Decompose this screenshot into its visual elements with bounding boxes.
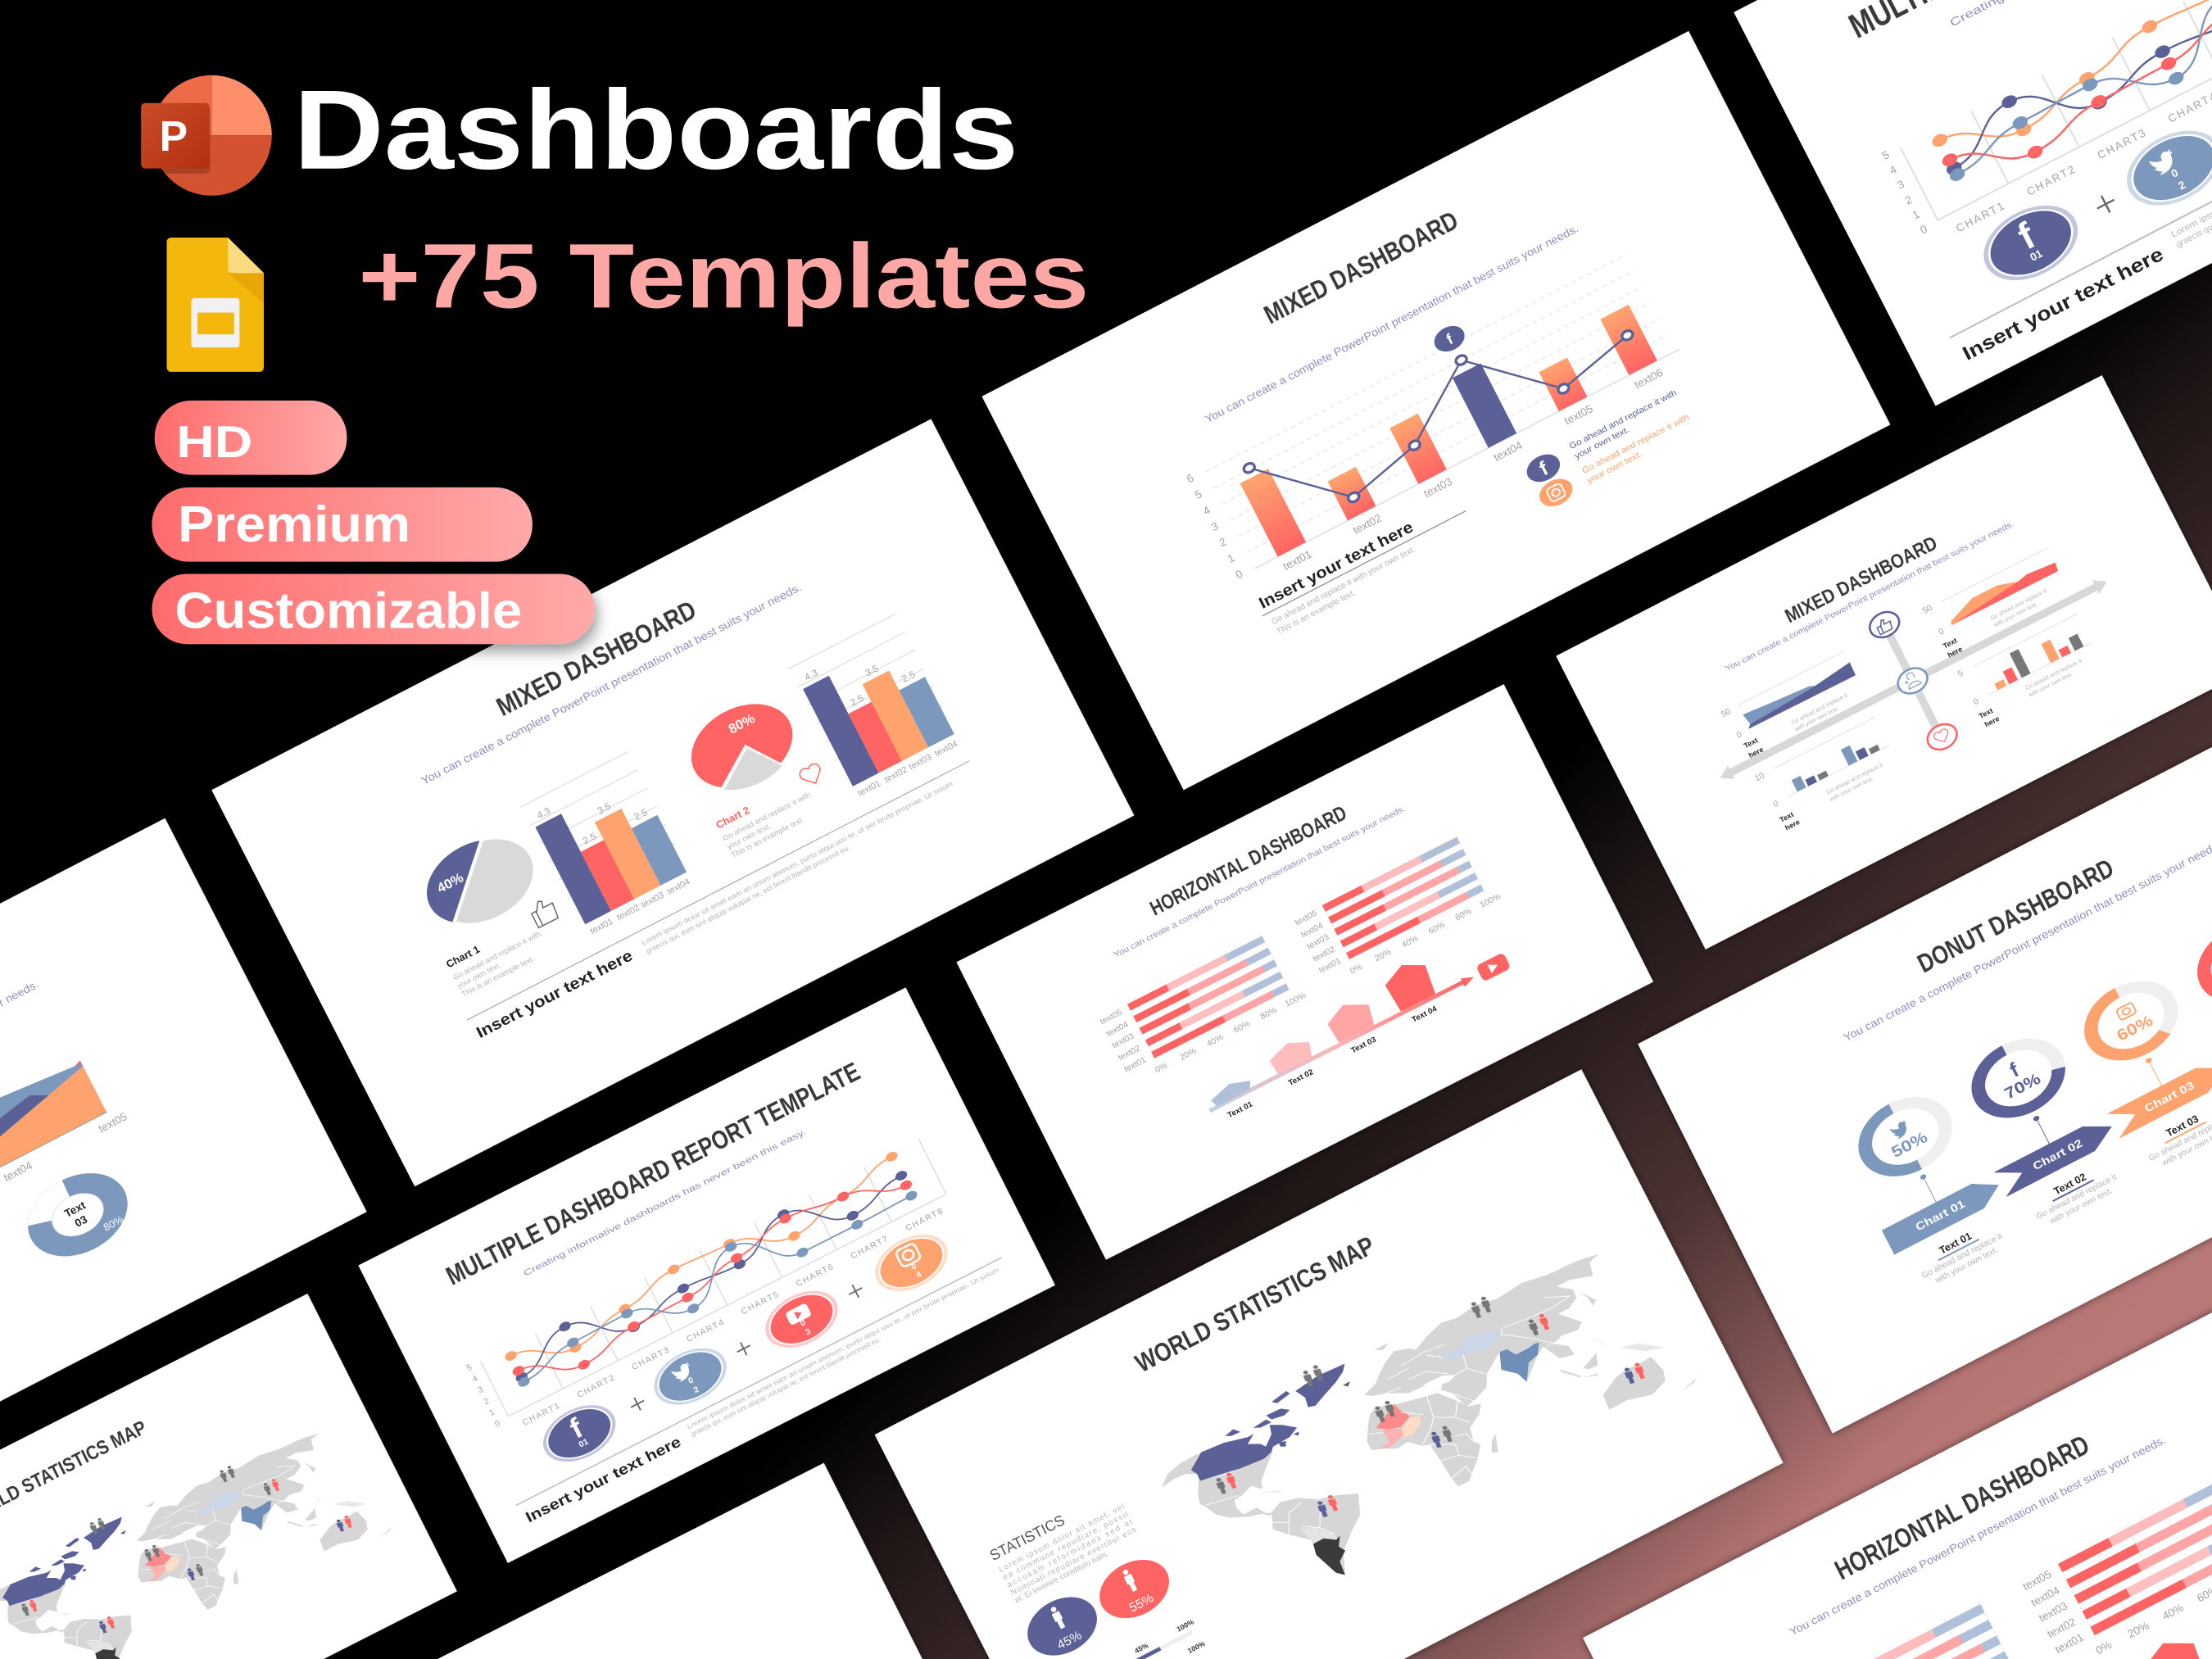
bar and line chart: text03: [1421, 475, 1454, 500]
subtitle: You can create a complete PowerPoint presentation that best suits your needs.: [1203, 222, 1580, 425]
cross arrows and circles: [1687, 515, 2141, 845]
badge labels: f: [565, 1412, 588, 1445]
captions: with your own text.: [1933, 1245, 2000, 1285]
chart 1 text: Chart 1: [444, 944, 482, 970]
chart labels: 40%: [1400, 934, 1420, 950]
subtitle: You can create a complete PowerPoint presentation that best suits your needs.: [419, 581, 803, 787]
title: MIXED DASHBOARD: [1259, 205, 1462, 329]
chart 2 text: This is an example text.: [730, 815, 805, 859]
legend icons: f: [1536, 457, 1552, 480]
bar chart 2: text04: [933, 739, 959, 759]
insert text block: graecis qui, eum sint aliquip volutpat ne, est ferent blandit processit eu.: [645, 843, 851, 955]
area chart right: 50: [1921, 604, 1934, 616]
bar and line chart: 4: [1201, 504, 1213, 518]
chart 2 text: Chart 2: [714, 805, 751, 832]
bar chart left: here: [1784, 818, 1802, 832]
bar chart right: Text: [1978, 706, 1994, 720]
chart labels: text03: [2037, 1599, 2069, 1625]
area chart: text05: [97, 1110, 129, 1135]
title: MIXED DASHBOARD: [492, 595, 700, 722]
statistics text: et. Ei invenire constituto nam.: [1013, 1549, 1110, 1605]
chart labels: CHART6: [795, 1262, 836, 1289]
chart 1 text: This is an example text.: [460, 954, 536, 999]
chart labels: CHART5: [740, 1290, 782, 1317]
ribbons and connectors: [1868, 970, 2212, 1255]
area chart: text04: [2, 1159, 34, 1184]
chart labels: 4: [471, 1374, 479, 1385]
bar and line chart: text05: [1562, 402, 1595, 427]
bar chart 2: 3.5: [863, 663, 881, 678]
area chart right: Text: [1942, 637, 1958, 650]
map: [1032, 1036, 1829, 1659]
pill: Premium: [152, 487, 533, 562]
chart labels: 40%: [2160, 1602, 2186, 1622]
panel: horizontal dashboard bottom right: [1583, 1272, 2212, 1659]
pill: Premium: Premium: [178, 496, 410, 553]
title: MIXED DASHBOARD: [1782, 533, 1941, 628]
bar chart right: with your own text.: [2028, 672, 2074, 699]
pie 1: [413, 821, 547, 942]
panel: multiple dashboard top right: Insert your text here: [1959, 243, 2167, 365]
area chart right: 0: [1938, 627, 1946, 637]
donut 4: [2179, 903, 2212, 1022]
chart labels: text01: [2053, 1631, 2086, 1656]
area chart left: Go ahead and replace it: [1791, 693, 1848, 726]
panel: multiple dashboard top right: 3: [1895, 178, 1906, 192]
panel: multiple dashboard top right: 01: [2028, 247, 2045, 264]
bar chart 1: text01: [589, 917, 614, 936]
bar chart 2: 4.3: [803, 668, 820, 683]
stacked bars and houses: [1805, 1471, 2212, 1659]
legend text: [1568, 388, 1696, 486]
chart labels: Text 01: [1226, 1099, 1255, 1120]
panel: multiple dashboard top right: 1: [1911, 208, 1922, 222]
progress bars: [1128, 1617, 1207, 1659]
captions: [1913, 1100, 2212, 1290]
panel: mixed dashboard line and bars: [981, 31, 1890, 790]
pie 2: 80%: [726, 710, 758, 737]
legend text: Go ahead and replace it with: [1568, 388, 1679, 451]
chart labels: [1099, 832, 1535, 1153]
bar chart 2: text03: [908, 752, 933, 772]
panel: horizontal dashboard center: [956, 684, 1653, 1260]
ribbons and connectors: Chart 01: [1914, 1197, 1968, 1233]
title: WORLD STATISTICS MAP: [1131, 1231, 1379, 1378]
chart labels: 0: [494, 1419, 502, 1429]
subtitle: You can create a complete PowerPoint presentation that best suits your needs.: [1842, 839, 2212, 1044]
panel: multiple dashboard top right: 4: [1888, 163, 1899, 177]
donut 3: 60%: [2115, 1013, 2156, 1045]
panel: multiple dashboard top right: 0: [2169, 166, 2180, 180]
statistics text: accusam reformidans sed at: [1005, 1517, 1134, 1590]
donut 1: [1854, 1090, 1957, 1184]
stacked bars and houses: [1126, 835, 1521, 1131]
chart labels: text05: [1099, 1008, 1124, 1027]
panel: multiple dashboard top right: f: [2011, 214, 2042, 257]
donut text 03: 03: [73, 1213, 89, 1230]
chart labels: 2: [483, 1397, 491, 1407]
insert text block: [1253, 493, 1478, 639]
chart 1 text: Go ahead and replace it with: [451, 930, 542, 981]
captions: with your own text.: [2048, 1186, 2114, 1226]
panel: multiple dashboard top right: CHART1: [1954, 199, 2007, 234]
bar chart left: 0: [1772, 799, 1780, 809]
area chart left: 50: [1720, 707, 1733, 719]
panel: mixed dashboard cross: [1556, 375, 2212, 950]
subtitle: You can create a complete PowerPoint presentation that best suits your needs.: [1724, 519, 2015, 673]
donut 2: [1953, 1019, 2083, 1138]
chart labels: CHART8: [904, 1207, 945, 1233]
chart labels: 20%: [1179, 1047, 1198, 1063]
chart labels: text03: [1306, 933, 1330, 951]
bar and line chart: text06: [1632, 366, 1665, 391]
chart 1 text: your own text.: [456, 961, 502, 990]
ribbons and connectors: Chart 03: [2142, 1079, 2196, 1115]
bar chart right: Go ahead and replace it: [2024, 659, 2083, 691]
bar chart 1: text03: [640, 891, 666, 910]
subtitle: You can create a complete PowerPoint presentation that best suits your needs.: [1113, 805, 1407, 960]
pill: HD: HD: [176, 416, 252, 467]
map: [0, 1268, 492, 1659]
donut text 03: Text: [62, 1199, 88, 1220]
chart labels: text02: [2045, 1616, 2078, 1640]
subtitle: Creating informative dashboards has never been this easy.: [523, 1127, 808, 1279]
chart labels: 40%: [1206, 1033, 1225, 1049]
statistics text: STATISTICS: [986, 1512, 1067, 1564]
chart labels: text05: [2021, 1568, 2053, 1593]
chart labels: CHART2: [576, 1373, 617, 1400]
panel: multiple dashboard top right: 5: [1880, 148, 1891, 162]
donut text 03: 80%: [102, 1213, 125, 1233]
area chart left: with your own text.: [1793, 706, 1840, 733]
progress bars: 45%: [1133, 1641, 1149, 1655]
chart labels: 80%: [1259, 1006, 1279, 1022]
panel: multiple dashboard top right: CHART2: [2024, 162, 2078, 198]
bar and line chart: 2: [1217, 535, 1228, 549]
subtitle: You can create a complete PowerPoint presentation that best suits your needs.: [1788, 1434, 2168, 1639]
insert text block: Go ahead and replace it with your own text.: [1270, 545, 1416, 627]
bar and line chart: text01: [1281, 548, 1313, 573]
bar chart 1: text02: [615, 903, 641, 922]
bar chart 1: 3.5: [596, 801, 613, 817]
title: DONUT DASHBOARD: [1913, 853, 2119, 978]
captions: Go ahead and replace it: [1920, 1232, 2004, 1281]
chart 2 text: [714, 777, 821, 859]
bar and line chart: 1: [1226, 551, 1236, 565]
chart labels: text03: [1111, 1031, 1136, 1050]
pill: HD: [155, 401, 347, 475]
bar chart right: here: [1983, 714, 2001, 728]
badge labels: 01: [578, 1437, 590, 1449]
area chart right: Go ahead and replace it: [1990, 588, 2047, 622]
captions: Go ahead and replace it: [2035, 1172, 2119, 1222]
chart labels: 3: [477, 1385, 485, 1395]
bar chart 2: 2.5: [900, 669, 918, 685]
panel: world statistics map: [863, 1036, 1829, 1659]
chart labels: 0%: [2094, 1639, 2114, 1657]
bar chart left: Text: [1779, 810, 1795, 824]
area chart left: 0: [1735, 730, 1743, 741]
title: HORIZONTAL DASHBOARD: [1830, 1430, 2094, 1586]
pill: Customizable: Customizable: [175, 582, 522, 639]
captions: Text 02: [2052, 1171, 2088, 1197]
panel: left stacked area and donut: [0, 818, 367, 1577]
chart labels: 80%: [1454, 907, 1473, 922]
area chart right: [1921, 545, 2073, 660]
bar chart left: 10: [1753, 771, 1766, 783]
icon: powerpoint: P: [160, 112, 188, 160]
panel: world statistics map left: [0, 1268, 492, 1659]
chart labels: text04: [2029, 1584, 2062, 1609]
panel: donut dashboard: [1638, 678, 2212, 1434]
badge labels: 0: [910, 1262, 918, 1272]
bar chart 1: 2.5: [581, 831, 598, 846]
chart 1 text: [444, 915, 551, 999]
heading: Dashboards: Dashboards: [293, 67, 1018, 193]
statistics text: ea commune repudiare, possit: [1002, 1510, 1131, 1582]
area chart left: [1720, 649, 1869, 762]
badge labels: 2: [692, 1385, 700, 1395]
chart labels: Text 02: [1287, 1067, 1315, 1088]
chart 2 text: Go ahead and replace it with: [722, 791, 812, 842]
panel: multiple dashboard top right: 2: [2176, 179, 2187, 193]
chart labels: 60%: [1427, 921, 1447, 936]
insert text block: [467, 761, 981, 1044]
pie 1: 40%: [434, 870, 466, 896]
insert text block: Lorem ipsum dolor sit amet eam an unum alienum, purto atqui usu te, ut per brute propriae. Ut solum: [640, 780, 954, 947]
area chart left: here: [1747, 746, 1765, 759]
chart labels: Text 04: [1411, 1004, 1439, 1025]
chart labels: 5: [465, 1363, 474, 1373]
chart labels: 1: [488, 1407, 496, 1418]
bar and line chart: text02: [1351, 512, 1384, 537]
donut 1: 50%: [1889, 1129, 1930, 1162]
chart labels: 0%: [1154, 1062, 1169, 1075]
panel: blank slide bottom: [277, 1463, 973, 1659]
progress bars: 100%: [1175, 1617, 1195, 1634]
chart labels: text01: [1317, 957, 1343, 975]
chart labels: text05: [1294, 909, 1319, 927]
bar chart 2: text01: [856, 778, 882, 798]
gender circles: 45%: [1055, 1629, 1084, 1652]
panel: mixed dashboard pies: [211, 419, 1134, 1186]
statistics text: [986, 1484, 1142, 1606]
insert text block: Insert your text here: [1257, 519, 1416, 613]
bar chart right: [1956, 610, 2105, 729]
legend text: your own text.: [1585, 449, 1643, 486]
panel: multiple dashboard report template: [358, 987, 1055, 1563]
chart labels: text04: [1300, 921, 1325, 940]
donut text 03: [14, 1157, 142, 1272]
donut 2: f: [2006, 1058, 2023, 1082]
bar chart 1: 2.5: [632, 807, 650, 823]
area chart left: Text: [1743, 736, 1759, 750]
bar chart 1: 4.3: [535, 805, 552, 821]
bar chart left: Go ahead and replace it: [1825, 763, 1883, 796]
chart labels: [1770, 1503, 2212, 1659]
panel: multiple dashboard top right: 0: [1918, 223, 1929, 236]
badge labels: 0: [687, 1376, 696, 1386]
bar and line chart: text04: [1492, 439, 1525, 464]
area chart: [0, 1049, 129, 1226]
chart labels: CHART7: [850, 1235, 891, 1261]
panel: multiple dashboard top right: [1734, 0, 2212, 406]
insert text block: Insert your text here: [474, 947, 636, 1042]
icon: thumb: [528, 896, 560, 928]
pie 2: [677, 687, 808, 807]
bar chart 1: text04: [666, 877, 691, 896]
bar chart right: 5: [1956, 669, 1965, 679]
badge labels: 3: [804, 1327, 813, 1337]
ribbons and connectors: Chart 02: [2031, 1137, 2084, 1172]
statistics text: Nominati repudiare evertitur eos: [1009, 1525, 1138, 1598]
heading: +75 Templates: +75 Templates: [358, 224, 1089, 327]
chart labels: 60%: [1232, 1019, 1252, 1036]
title: HORIZONTAL DASHBOARD: [1147, 802, 1350, 920]
bar and line chart: f: [1444, 330, 1457, 347]
chart labels: text01: [1123, 1056, 1148, 1074]
chart labels: CHART4: [686, 1317, 727, 1344]
insert text block: Insert your text here: [523, 1433, 683, 1525]
bar chart left: [1753, 714, 1903, 834]
chart labels: text04: [1105, 1020, 1130, 1039]
chart labels: CHART3: [631, 1345, 672, 1372]
bar chart right: 0: [1972, 697, 1980, 707]
bar and line chart: 0: [1234, 568, 1244, 581]
bar chart 2: [788, 614, 963, 801]
legend text: Go ahead and replace it with: [1580, 412, 1691, 476]
chart labels: text02: [1312, 945, 1337, 963]
icon: powerpoint: [141, 75, 272, 196]
badge labels: 0: [799, 1318, 808, 1329]
panel: multiple dashboard top right: 2: [1903, 193, 1914, 207]
panel: multiple dashboard top right: CHART3: [2096, 126, 2149, 161]
chart 2 text: your own text.: [726, 822, 772, 851]
chart labels: [465, 1140, 945, 1439]
bar chart left: with your own text.: [1829, 776, 1874, 803]
chart labels: 20%: [1374, 948, 1393, 963]
bar chart 2: 2.5: [849, 693, 866, 709]
bar and line chart: 6: [1185, 472, 1195, 485]
bar chart 1: [520, 751, 696, 939]
captions: Text 01: [1938, 1231, 1974, 1257]
legend icons: [1522, 449, 1577, 512]
title: MULTIPLE DASHBOARD REPORT TEMPLATE: [442, 1057, 864, 1290]
gender circles: 55%: [1127, 1591, 1156, 1616]
insert text block: Lorem ipsum dolor sit amet eam an unum alienum, purto atqui usu te, ut per brute propriae. Ut solum: [686, 1266, 1000, 1430]
statistics text: Lorem ipsum dolor sit amet, vel: [998, 1503, 1126, 1575]
chart labels: CHART1: [521, 1401, 562, 1428]
chart labels: text02: [1117, 1044, 1142, 1063]
insert text block: [521, 1266, 1006, 1525]
area chart right: with your own text.: [1992, 601, 2038, 629]
area chart right: here: [1947, 645, 1964, 659]
icon: google slides: [167, 238, 264, 372]
chart labels: 0%: [1349, 963, 1364, 976]
legend text: your own text.: [1573, 424, 1631, 461]
gender circles: [1018, 1548, 1179, 1659]
bar and line chart: 3: [1209, 520, 1221, 533]
badge labels: [565, 1244, 924, 1453]
insert text block: This is an example text.: [1276, 588, 1358, 637]
bar chart 2: text02: [883, 765, 909, 785]
pill: Customizable: [152, 573, 595, 644]
chart labels: Text 03: [1349, 1036, 1378, 1055]
chart labels: 100%: [1284, 991, 1308, 1009]
icon: heart: [798, 762, 825, 788]
bar and line chart: 5: [1193, 487, 1203, 501]
chart labels: 20%: [2126, 1619, 2151, 1640]
insert text block: graecis qui, eum sint aliquip volutpat ne, est ferent blandit processit eu.: [690, 1335, 882, 1438]
badge labels: 4: [915, 1270, 923, 1281]
line chart and badges: [451, 1129, 1002, 1506]
captions: Text 03: [2164, 1113, 2201, 1139]
donut 3: [2059, 955, 2203, 1086]
progress bars: 100%: [1186, 1639, 1207, 1655]
donut 2: 70%: [2002, 1071, 2044, 1104]
bar and line chart: [1180, 237, 1688, 594]
chart labels: 100%: [1479, 892, 1503, 910]
